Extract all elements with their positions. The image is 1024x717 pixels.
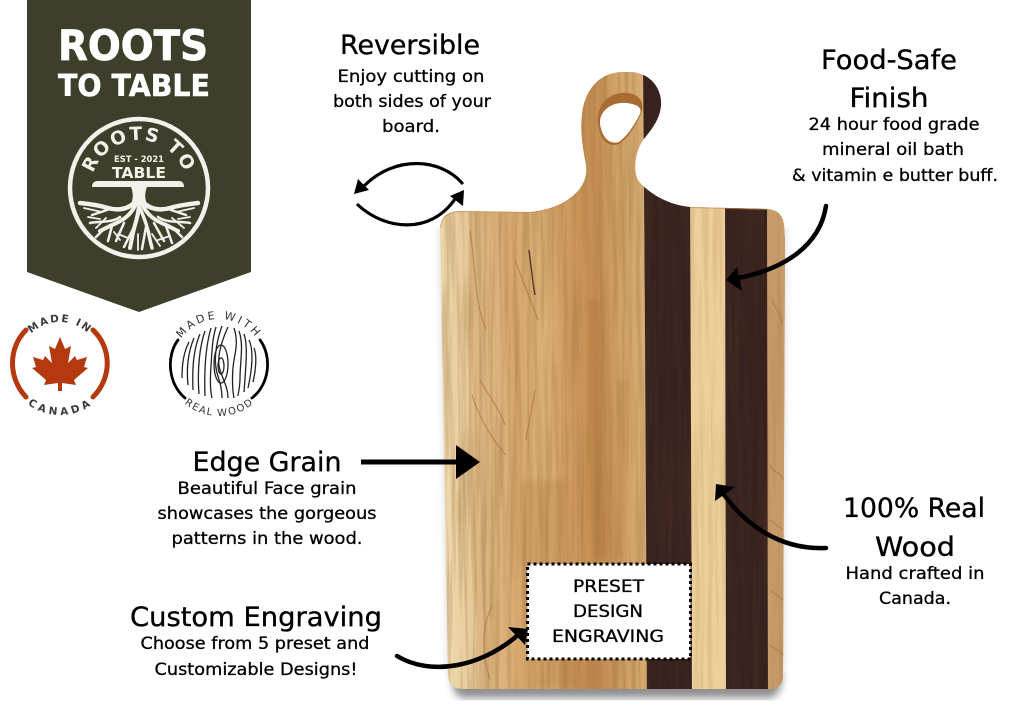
light stripes [690,200,726,700]
engraving box: ENGRAVING [552,627,664,647]
cutting board [440,72,785,689]
badge: made with real wood [168,311,269,416]
arrow: food-safe [726,206,826,291]
banner [27,0,251,312]
banner title: Roots: ROOTS [58,21,208,70]
walnut stripes [643,74,768,689]
icon: wood grain rings [182,326,256,398]
text: 100% Real Wood: Wood [875,532,955,563]
grain texture [442,72,782,689]
handle hole [598,93,642,145]
badge: made in Canada [10,314,110,416]
text: Edge Grain: patterns in the wood. [172,529,362,549]
logo: roots to table emblem: ROOTS TO [82,126,194,172]
arrow: real wood [715,484,826,548]
arrow: reversible lower [358,190,464,225]
badge: made in Canada: MADE IN [27,314,92,333]
text: Custom Engraving: Custom Engraving [130,602,382,633]
text: 100% Real Wood [843,493,985,609]
logo: roots to table emblem: TABLE [112,164,166,182]
arrow: edge grain [361,445,480,479]
engraving box: DESIGN [573,602,643,622]
text: Reversible: Reversible [340,30,480,61]
text: 100% Real Wood: 100% Real [843,493,985,524]
logo: roots to table emblem [68,116,210,260]
badge: made with real wood: REAL WOOD [185,398,252,416]
text: 100% Real Wood: Hand crafted in [846,564,984,584]
arrow: reversible upper [354,164,462,194]
text: Edge Grain: Beautiful Face grain [178,479,356,499]
text: Custom Engraving [130,602,382,680]
text: Edge Grain: Edge Grain [192,447,342,478]
text: Food-Safe Finish: & vitamin e butter buff. [792,166,998,186]
icon: maple leaf [32,337,88,391]
text: 100% Real Wood: Canada. [879,589,951,609]
engraving box [528,564,690,659]
text: Custom Engraving: Customizable Designs! [154,660,358,680]
badge: made in Canada: CANADA [29,399,91,416]
text: Reversible: board. [382,117,440,137]
text: Edge Grain [158,447,377,549]
text: Food-Safe Finish: Food-Safe [821,45,957,76]
arrow: custom engraving [397,627,528,667]
board edge tint [440,191,767,228]
text: Food-Safe Finish [792,45,998,186]
text: Food-Safe Finish: 24 hour food grade [808,115,980,135]
text: Food-Safe Finish: Finish [850,83,928,114]
text: Reversible: Enjoy cutting on [338,67,484,87]
badge: made with real wood: MADE WITH [176,311,260,338]
wood tone streaks [520,300,628,690]
logo: roots to table emblem: EST - 2021 [114,155,164,165]
text: Custom Engraving: Choose from 5 preset and [140,634,370,654]
engraving box: PRESET [573,577,645,597]
text: Food-Safe Finish: mineral oil bath [822,140,964,160]
text: Edge Grain: showcases the gorgeous [158,504,377,524]
banner title: To Table: TO TABLE [58,69,210,104]
text: Reversible [333,30,491,137]
text: Reversible: both sides of your [333,92,491,112]
board shadow [440,226,785,698]
